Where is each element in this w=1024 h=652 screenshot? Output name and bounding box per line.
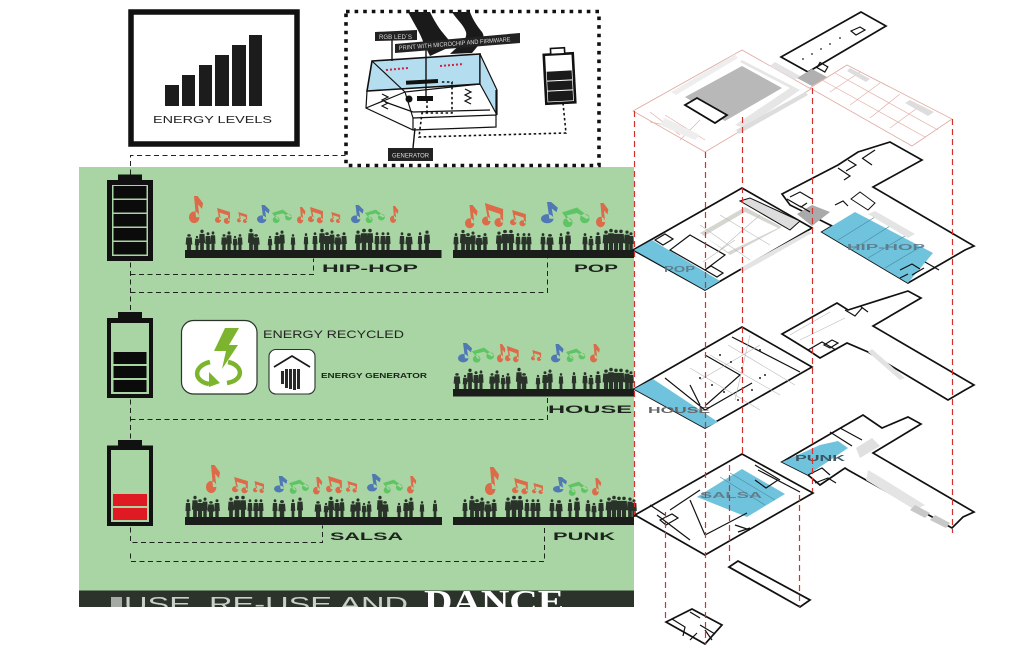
- room: salsa: SALSA: [700, 490, 762, 500]
- crowd: salsa: [185, 496, 442, 525]
- room: hip-hop: HIP-HOP: [847, 243, 927, 252]
- crowd: hip-hop: [185, 229, 442, 258]
- battery 3: low, red: [107, 440, 153, 526]
- battery 2: half: [107, 312, 153, 398]
- crowd: punk: [453, 496, 637, 525]
- label: energy generator: ENERGY GENERATOR: [321, 371, 428, 380]
- music notes: salsa: [206, 465, 416, 494]
- plan: level with salsa and punk: [635, 415, 974, 555]
- connector: battery to generator: [419, 82, 566, 137]
- diagram: blue sensor tile: [366, 40, 497, 130]
- room: pop: POP: [664, 265, 696, 274]
- icon: dancing legs: [408, 12, 484, 56]
- music notes: house: [458, 343, 600, 363]
- label: punk: PUNK: [553, 531, 615, 543]
- music notes: hip-hop: [189, 196, 398, 224]
- connector: punk to battery: [130, 526, 544, 562]
- connector: house to battery: [130, 398, 548, 446]
- label: salsa: SALSA: [330, 531, 403, 543]
- label: energy recycled: ENERGY RECYCLED: [263, 329, 404, 341]
- plan: level with house: [634, 291, 974, 428]
- room: punk: [782, 441, 848, 475]
- connector: salsa to battery: [130, 526, 322, 542]
- connector: pop to battery: [130, 258, 548, 292]
- icon: energy recycled: [182, 320, 257, 394]
- music notes: punk: [485, 467, 601, 496]
- title banner: use, re-use and dance: DANCE: [424, 583, 564, 619]
- crowd: pop: [453, 229, 634, 258]
- icon: small battery: [543, 47, 575, 104]
- label: RGB LEDs: [375, 30, 417, 41]
- plan: roof level: [633, 12, 952, 152]
- label: hip-hop: HIP-HOP: [322, 263, 418, 275]
- room: pop: [634, 240, 720, 290]
- label: pop: POP: [574, 263, 618, 275]
- title banner: use, re-use and dance: USE, RE-USE AND: [124, 594, 408, 616]
- connector: hip-hop to battery: [130, 258, 314, 318]
- plan: level with pop and hip-hop: [633, 142, 974, 290]
- heading: energy levels: ENERGY LEVELS: [153, 114, 272, 126]
- chart: signal bars: [165, 35, 262, 106]
- label: generator: [388, 128, 433, 161]
- plan: strip floor: [729, 561, 810, 607]
- connector: energy box to top battery: [130, 156, 346, 174]
- panel: green dance floor background: [79, 167, 634, 607]
- icon: energy generator house: [269, 350, 315, 394]
- room: hip-hop: [822, 212, 933, 283]
- title banner: use, re-use and dance: [79, 590, 634, 607]
- panel: energy levels: [131, 12, 297, 144]
- label: house: HOUSE: [548, 404, 632, 416]
- label: generator: GENERATOR: [392, 152, 429, 160]
- room: salsa: [697, 469, 785, 517]
- room: house: [634, 379, 718, 428]
- red dashed projection lines: [634, 88, 952, 645]
- crowd: house: [453, 368, 634, 396]
- battery 1: full: [107, 174, 153, 261]
- label: RGB LEDs: RGB LED´S: [379, 34, 413, 41]
- label: print with microchip and firmware: PRINT WITH MICROCHIP AND FIRMWARE: [399, 36, 511, 52]
- panel: floor tile generator diagram: [346, 12, 599, 166]
- music notes: pop: [465, 202, 608, 228]
- room: punk: PUNK: [795, 454, 845, 463]
- room: house: HOUSE: [648, 405, 711, 415]
- plan: basement: [666, 609, 722, 644]
